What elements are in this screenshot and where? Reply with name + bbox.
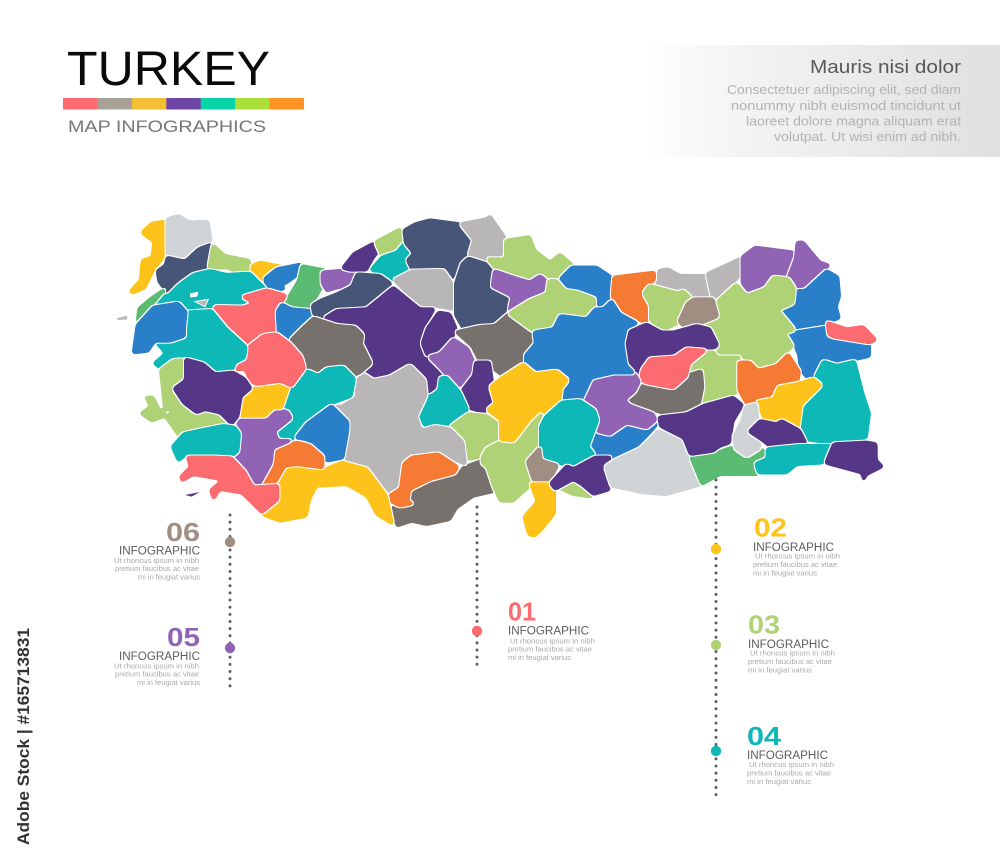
callout 06: INFOGRAPHIC — [119, 546, 200, 558]
callout 06: Ut rhoncus ipsum in nibh — [114, 556, 199, 565]
callout 03: Ut rhoncus ipsum in nibh — [750, 648, 835, 658]
panel: intro text: nonummy nibh euismod tincidunt ut — [731, 98, 961, 113]
stock credit: Adobe Stock | #165713831 — [14, 628, 33, 845]
callout 06: 06 — [166, 517, 200, 547]
callout 01: INFOGRAPHIC — [508, 626, 589, 638]
callout 01: pretium faucibus ac vitae — [508, 644, 592, 654]
callout 02 — [711, 480, 840, 795]
title: TURKEY — [67, 43, 270, 96]
callout 04: mi in feugiat varius — [747, 777, 811, 786]
callout 06 — [114, 515, 235, 582]
callout 06: mi in feugiat varius — [138, 572, 200, 582]
callout 02: pretium faucibus ac vitae — [753, 560, 837, 569]
map of Turkey: eastern provinces — [482, 236, 883, 537]
panel: intro text: volutpat. Ut wisi enim ad nibh. — [774, 129, 961, 144]
callout 03: 03 — [748, 610, 780, 640]
callout 02: INFOGRAPHIC — [753, 542, 834, 554]
callout 01: Ut rhoncus ipsum in nibh — [510, 636, 595, 646]
colour bar — [63, 98, 304, 110]
callout 02: mi in feugiat varius — [753, 568, 817, 578]
callout 04: Ut rhoncus ipsum in nibh — [749, 760, 834, 769]
callout 03: mi in feugiat varius — [748, 666, 812, 674]
callout 03: INFOGRAPHIC — [748, 639, 829, 651]
callout 05: Ut rhoncus ipsum in nibh — [114, 662, 199, 670]
callout 04 — [711, 721, 834, 786]
callout 01: mi in feugiat varius — [508, 653, 571, 662]
panel: intro text: Mauris nisi dolor — [810, 56, 961, 77]
panel: intro text — [645, 45, 1000, 157]
callout 04: pretium faucibus ac vitae — [747, 768, 831, 778]
callout 05: mi in feugiat varius — [137, 678, 200, 687]
map of Turkey: western provinces — [117, 215, 535, 527]
callout 05: pretium faucibus ac vitae — [115, 670, 199, 678]
callout 03: pretium faucibus ac vitae — [748, 657, 832, 666]
callout 04: INFOGRAPHIC — [747, 750, 828, 762]
callout 04: 04 — [747, 721, 782, 751]
callout 02: Ut rhoncus ipsum in nibh — [755, 552, 840, 560]
callout 03 — [711, 610, 835, 674]
callout 05 — [114, 550, 235, 691]
subtitle: MAP INFOGRAPHICS — [68, 117, 266, 136]
callout 06: pretium faucibus ac vitae — [115, 564, 199, 573]
callout 05: 05 — [167, 622, 200, 652]
callout 01: 01 — [508, 596, 536, 626]
callout 02: 02 — [754, 512, 787, 542]
panel: intro text: laoreet dolore magna aliquam erat — [746, 114, 961, 128]
callout 05: INFOGRAPHIC — [119, 651, 200, 663]
panel: intro text: Consectetuer adipiscing elit, sed diam — [727, 82, 961, 97]
callout 01 — [472, 507, 595, 668]
